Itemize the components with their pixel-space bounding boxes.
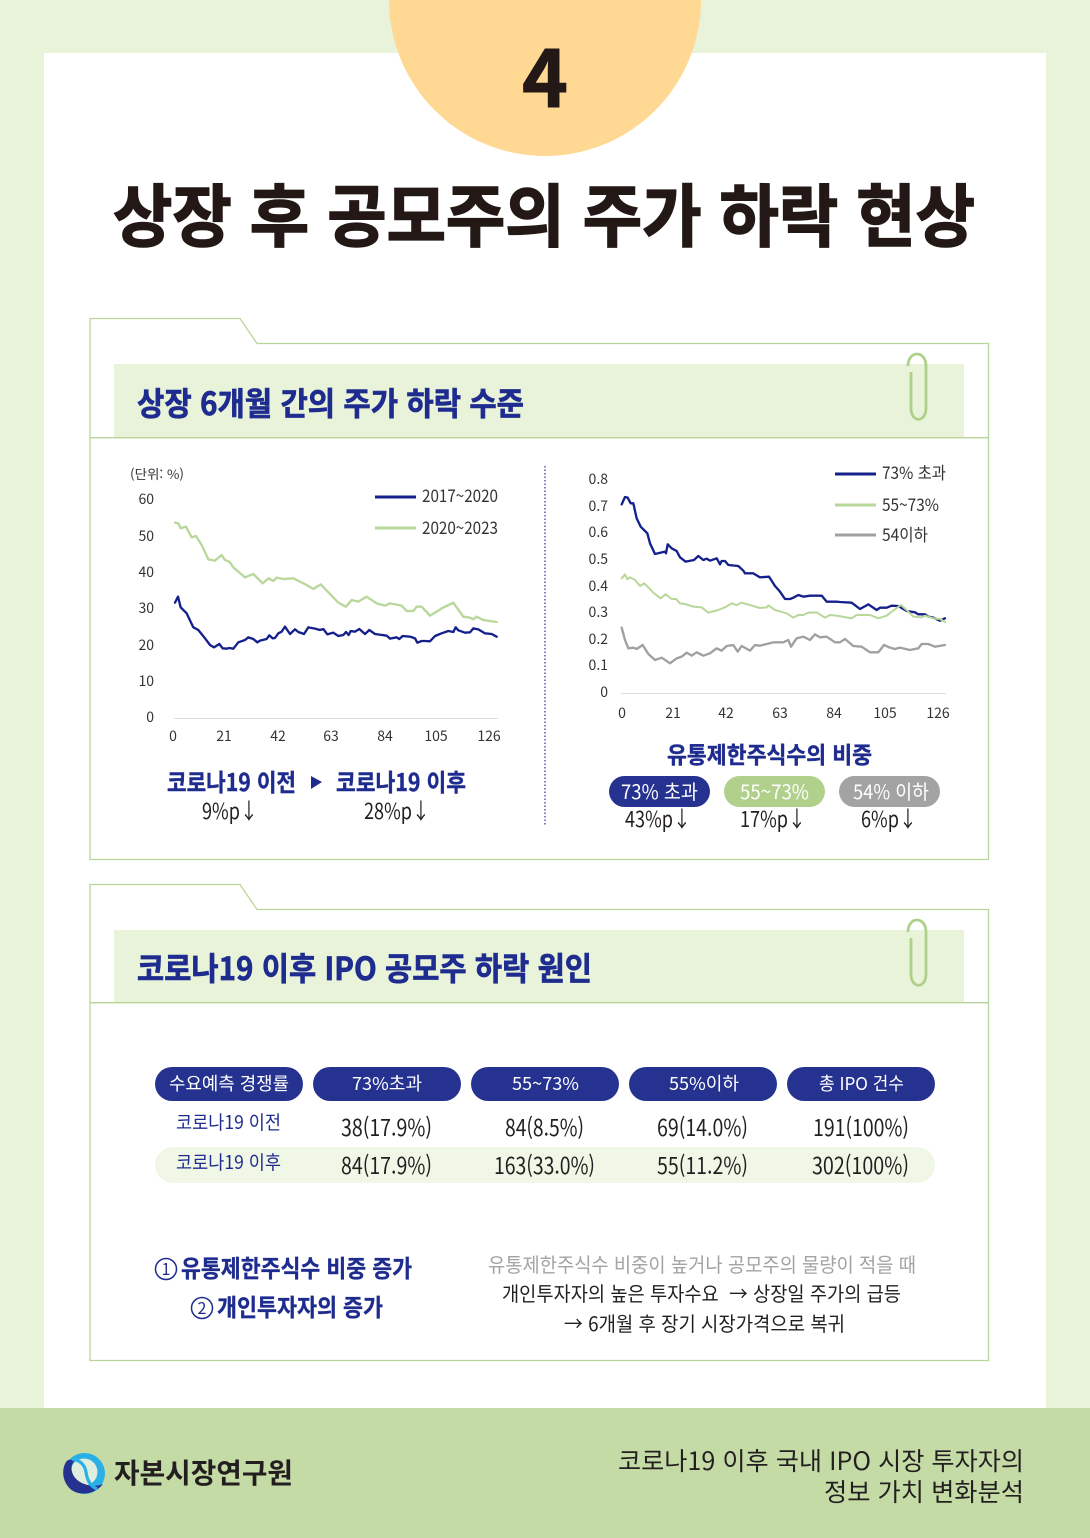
y axis labels: 0 [146,707,154,727]
x axis labels: 63 [772,703,788,723]
series: over 73 percent [622,497,945,621]
table row: after COVID-19 [155,1147,935,1183]
legend: 73% 초과 [882,459,946,484]
institute name: 자본시장연구원 [114,1452,293,1492]
title: 상장 후 공모주의 주가 하락 현상 [113,162,975,261]
panel: causes of IPO decline after COVID-19 [90,884,988,1360]
panel frame: folder outline [90,318,988,860]
y axis labels: 0.3 [589,602,608,622]
causes list [156,1249,412,1323]
table header pills: 총 IPO 건수 [819,1070,904,1096]
icon: paperclip [908,920,926,985]
x axis labels: 63 [323,726,339,746]
y axis labels: 0.8 [589,469,608,489]
header divider [90,437,988,438]
left chart summary [167,763,466,826]
report title: 코로나19 이후 국내 IPO 시장 투자자의 [618,1442,1024,1478]
x axis labels: 42 [718,703,734,723]
x axis labels: 126 [477,726,501,746]
cause 2: 개인투자자의 증가 [217,1288,383,1323]
y axis labels: 0.7 [589,496,608,516]
table row: after COVID-19: 163(33.0%) [494,1147,595,1181]
pill: 55 to 73 percent [724,776,825,807]
heading band [114,364,964,437]
table row: after COVID-19: 코로나19 이후 [176,1148,281,1175]
table row: before COVID-19: 69(14.0%) [657,1109,748,1143]
table header pills [155,1067,935,1101]
heading band [114,930,964,1002]
table row: before COVID-19: 84(8.5%) [505,1109,584,1143]
explanation text: → 6개월 후 장기 시장가격으로 복귀 [564,1308,845,1337]
table row: before COVID-19: 38(17.9%) [341,1109,432,1143]
x axis labels: 0 [618,703,626,723]
table row: after COVID-19: 302(100%) [812,1147,909,1181]
heading: 코로나19 이후 IPO 공모주 하락 원인 [137,944,592,990]
explanation text: 개인투자자의 높은 투자수요 → 상장일 주가의 급등 [502,1278,901,1307]
icon: paperclip [908,354,926,419]
y axis labels: 10 [138,671,154,691]
report title [618,1442,1024,1509]
pill: 55 to 73 percent: 55~73% [740,776,809,805]
right chart summary: 17%p↓ [740,802,806,834]
y axis labels [138,489,154,727]
x axis labels [169,726,501,746]
x axis labels: 84 [826,703,842,723]
table row: before COVID-19 [176,1108,909,1143]
left chart summary: 코로나19 이전 [167,763,296,798]
table header pills: 73%초과 [352,1070,422,1096]
legend [375,482,498,539]
line chart: right, by lock-up share [589,459,950,723]
x axis labels: 42 [270,726,286,746]
left chart summary: 9%p↓ [202,794,258,826]
pill: 54 percent or less: 54% 이하 [853,776,929,805]
x axis labels: 0 [169,726,177,746]
right chart summary [609,736,940,834]
y axis labels: 0.2 [589,629,608,649]
number badge: 4 [389,0,701,156]
y axis labels: 30 [138,598,154,618]
x axis labels: 105 [873,703,897,723]
y axis labels: 0.4 [589,576,608,596]
unit label: (단위: %) [130,464,184,483]
y axis labels: 20 [138,635,154,655]
x axis labels: 21 [216,726,232,746]
footer band [0,1408,1090,1538]
legend: 2020~2023 [422,514,498,539]
left chart summary: 코로나19 이후 [336,763,466,798]
y axis labels: 0.5 [589,549,608,569]
arrow [311,776,322,789]
legend: 2017~2020 [422,482,498,507]
report title: 정보 가치 변화분석 [824,1473,1024,1509]
explanation text [488,1249,916,1337]
y axis labels: 0 [600,682,608,702]
panel: price decline over six months [90,318,988,860]
right chart summary: 유통제한주식수의 비중 [667,736,872,770]
y axis labels: 40 [138,562,154,582]
x axis labels [618,703,950,723]
y axis labels: 0.1 [589,655,608,675]
table [155,1067,935,1183]
heading: 상장 6개월 간의 주가 하락 수준 [137,379,524,425]
cause 2: 2 [198,1295,207,1319]
legend: 54이하 [882,521,928,546]
number badge: 4: 4 [522,18,568,130]
legend: 55~73% [882,491,939,516]
explanation text: 유통제한주식수 비중이 높거나 공모주의 물량이 적을 때 [488,1249,916,1278]
right chart summary: 43%p↓ [625,802,691,834]
panel frame: folder outline [90,884,988,1360]
y axis labels: 60 [138,489,154,509]
cause 1: 유통제한주식수 비중 증가 [181,1249,412,1284]
table header pills: 55%이하 [669,1070,739,1096]
y axis labels [589,469,608,702]
table row: before COVID-19: 코로나19 이전 [176,1108,281,1135]
icon: institute logo [63,1453,105,1494]
legend [835,459,946,546]
left chart summary: 28%p↓ [364,794,430,826]
x axis labels: 105 [424,726,448,746]
cause 1: 1 [162,1256,170,1280]
table header pills: 55~73% [512,1070,579,1096]
series: 2020~2023 [175,523,497,622]
series: 2017~2020 [175,597,497,649]
line chart: left, by period [130,464,501,746]
right chart summary: 6%p↓ [861,802,917,834]
x axis labels: 126 [926,703,950,723]
series: 54 or less [622,628,945,663]
table row: after COVID-19: 84(17.9%) [341,1147,432,1181]
x axis labels: 21 [665,703,681,723]
y axis labels: 50 [138,526,154,546]
table row: after COVID-19: 55(11.2%) [657,1147,748,1181]
x axis labels: 84 [377,726,393,746]
series: 55 to 73 percent [622,574,945,622]
table row: before COVID-19: 191(100%) [813,1109,909,1143]
pill: over 73 percent: 73% 초과 [621,776,698,805]
table header pills: 수요예측 경쟁률 [169,1070,289,1096]
header divider [90,1002,988,1003]
y axis labels: 0.6 [589,522,608,542]
